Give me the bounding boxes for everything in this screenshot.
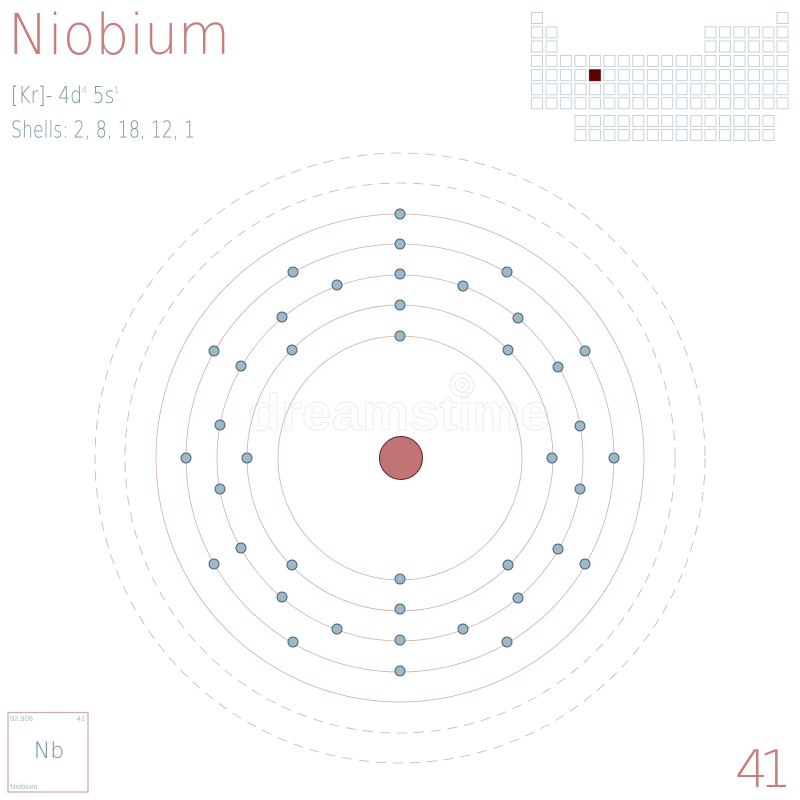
element card: Niobium	[10, 782, 38, 791]
empty dashed orbits	[95, 153, 705, 763]
atomic number: 41	[735, 740, 792, 800]
electron configuration: 1	[114, 86, 119, 96]
element card: Nb	[34, 739, 64, 764]
element card	[8, 712, 88, 792]
title: Niobium	[8, 3, 230, 68]
electron configuration: 4	[82, 86, 87, 96]
nucleus	[380, 436, 422, 480]
highlighted element cell	[589, 70, 600, 81]
element card: 92.906	[10, 714, 33, 723]
element card: 41	[77, 714, 85, 723]
watermark: dreamstime	[248, 384, 550, 442]
periodic table locator	[532, 12, 788, 140]
shell counts: Shells: 2, 8, 18, 12, 1	[11, 118, 195, 144]
electron configuration: [Kr]- 4d	[11, 83, 98, 109]
electron configuration: 5s	[87, 83, 114, 109]
electrons	[181, 209, 619, 676]
electron shells	[156, 214, 644, 702]
